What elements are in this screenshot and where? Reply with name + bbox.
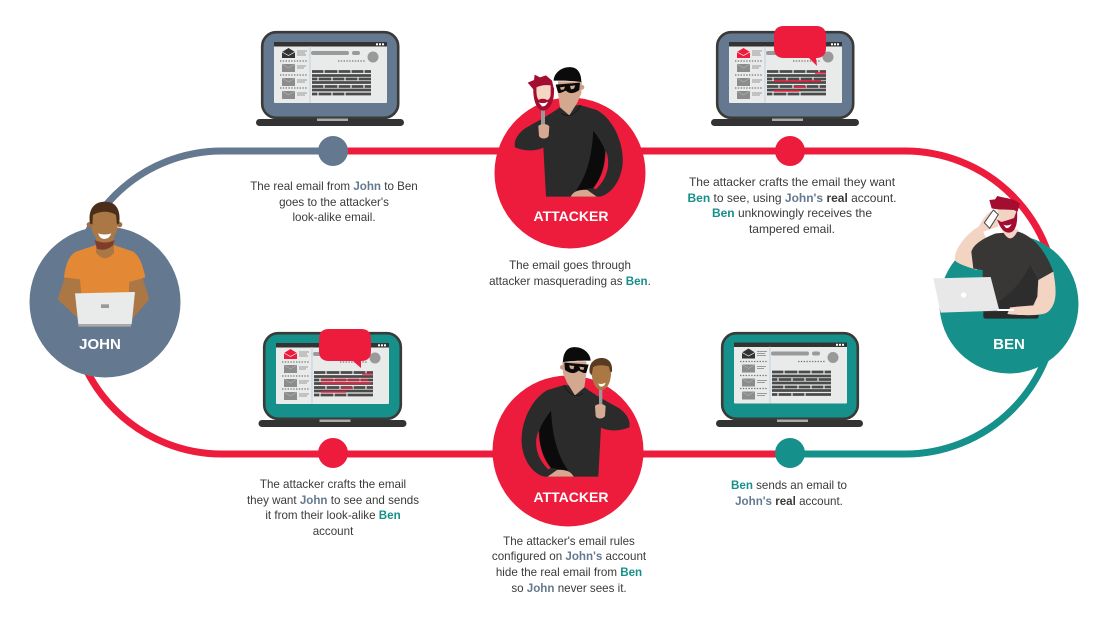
node: bottom left — [318, 438, 348, 468]
node: top right — [775, 136, 805, 166]
text: step 1: The real email from John to Ben — [250, 180, 418, 193]
text: step 3: Ben unknowingly receives the — [712, 206, 872, 220]
text: step 2: attacker masquerading as Ben. — [489, 275, 651, 288]
text: step 4: Ben sends an email to — [731, 479, 847, 492]
node: bottom right — [775, 438, 805, 468]
speech bubble — [774, 26, 826, 66]
laptop: top right, tampered email — [711, 26, 859, 126]
text: step 5: so John never sees it. — [511, 582, 627, 595]
text: step 6: account — [313, 525, 354, 538]
text: step 6: they want John to see and sends — [247, 494, 419, 507]
laptop: bottom right, Ben's email — [716, 333, 863, 427]
panel: attacker bottom — [492, 347, 644, 526]
label: Ben: BEN — [993, 336, 1025, 353]
panel: John — [30, 202, 180, 378]
text: step 4: John's real account. — [735, 495, 843, 508]
text: step 3: tampered email. — [749, 222, 835, 236]
connection line: Ben to teal node — [790, 302, 1056, 454]
text: step 1: goes to the attacker's — [279, 196, 389, 209]
figure: Ben on phone with laptop — [933, 196, 1056, 319]
text: step 6: it from their look-alike Ben — [265, 509, 401, 522]
laptop: bottom left, tampered email — [258, 329, 406, 427]
label: attacker top: ATTACKER — [534, 208, 608, 224]
panel: Ben — [933, 196, 1078, 374]
laptop: top left, real email — [256, 32, 404, 126]
text: step 3: The attacker crafts the email they want — [689, 175, 896, 189]
text: step 3: Ben to see, using John's real account. — [688, 191, 896, 205]
text: step 2: The email goes through — [509, 259, 631, 272]
text: step 6: The attacker crafts the email — [260, 478, 406, 491]
connection line: first node to Ben — [333, 151, 1056, 302]
connection line: John to first node — [70, 151, 333, 302]
text: step 5: hide the real email from Ben — [496, 566, 642, 579]
node: top left — [318, 136, 348, 166]
text: step 5: The attacker's email rules — [503, 535, 635, 548]
figure: John with laptop — [58, 202, 149, 327]
text: step 5: configured on John's account — [492, 550, 646, 563]
figure: attacker holding John mask — [522, 347, 630, 477]
text: step 1: look-alike email. — [292, 211, 376, 224]
speech bubble — [319, 329, 371, 368]
label: attacker bottom: ATTACKER — [534, 489, 608, 505]
label: John: JOHN — [79, 336, 121, 353]
connection line: John to bottom attacker — [70, 302, 790, 454]
figure: attacker holding Ben mask — [515, 67, 623, 197]
panel: attacker top — [494, 67, 646, 248]
